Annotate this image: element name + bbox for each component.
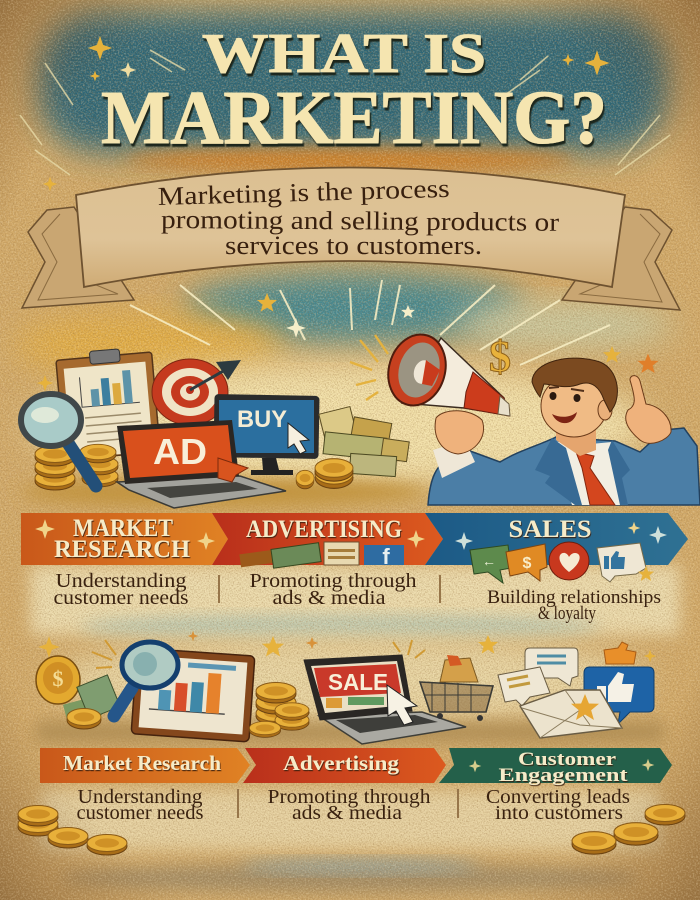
icon: BUY monitor	[213, 394, 320, 475]
ribbon labels: Customer	[518, 749, 617, 770]
icon: AD laptop: AD	[153, 431, 207, 472]
top process descriptions: ads & media	[272, 587, 386, 609]
bottom process descriptions: Understanding	[78, 786, 202, 808]
icon: speech bubbles	[498, 648, 578, 706]
icon: envelope with star	[520, 690, 622, 738]
ribbon stars	[35, 519, 667, 550]
icon: AD laptop	[117, 420, 286, 508]
ribbon labels	[54, 515, 592, 563]
icon: magnifying glass	[21, 394, 96, 486]
decorative coins left	[18, 806, 127, 855]
icon: coin and banknotes	[36, 656, 120, 729]
shirt	[552, 441, 624, 505]
icon: lower magnifying glass	[114, 642, 178, 716]
head	[541, 375, 607, 437]
icon: coin stacks	[35, 444, 118, 490]
process ribbon: top	[21, 513, 688, 565]
cuff and hand holding megaphone	[433, 440, 475, 478]
top process descriptions: Understanding	[56, 570, 186, 592]
sound lines	[350, 335, 388, 400]
segment: advertising	[212, 513, 443, 565]
segment: sales	[425, 513, 688, 565]
icon: lower coin stacks	[249, 682, 309, 737]
icon: sale laptop: SALE	[328, 669, 388, 695]
bottom process descriptions: customer needs	[76, 802, 204, 824]
tie	[576, 452, 615, 505]
banner text	[157, 174, 560, 260]
face	[550, 392, 556, 400]
top process descriptions: Building relationships	[487, 587, 661, 608]
icon: tablet chart	[131, 648, 255, 742]
bottom process descriptions: Converting leads	[486, 786, 630, 808]
top process descriptions: Promoting through	[250, 570, 416, 592]
icon: sale laptop	[304, 655, 466, 744]
segment: market research	[40, 748, 250, 783]
bottom process descriptions: ads & media	[292, 802, 402, 824]
lapels	[535, 438, 630, 505]
decorative coins right	[572, 804, 685, 854]
top process descriptions: customer needs	[54, 587, 189, 609]
bottom process descriptions: Promoting through	[268, 786, 430, 808]
banner text: Marketing is the process	[157, 174, 450, 211]
ribbon labels: MARKET	[73, 515, 173, 542]
burst rays under banner	[130, 280, 610, 365]
icon: dollar sign: $	[489, 332, 511, 381]
title: WHAT IS	[202, 23, 486, 85]
upper scene ground	[20, 477, 430, 507]
ribbon labels	[63, 749, 628, 786]
segment: advertising	[243, 748, 446, 783]
man with suit	[428, 358, 700, 505]
ribbon folds	[38, 214, 662, 302]
banner body	[76, 168, 625, 287]
ribbon tail right	[562, 207, 680, 310]
hair	[532, 358, 617, 412]
ribbon labels: Advertising	[283, 751, 400, 775]
gold stars around title	[43, 36, 610, 191]
ribbon labels: SALES	[508, 516, 592, 543]
icon row: social bubbles	[470, 542, 654, 583]
icon: target with arrow	[152, 359, 241, 425]
icon: shopping cart	[420, 655, 493, 721]
ribbon labels: ADVERTISING	[246, 516, 402, 543]
jacket	[428, 428, 700, 505]
process ribbon: bottom	[40, 748, 672, 786]
top process descriptions: & loyalty	[538, 603, 596, 624]
icon row: social bubbles: ←	[482, 553, 496, 569]
icon: coin and banknotes: $	[52, 666, 64, 691]
icon: clipboard with chart	[55, 346, 160, 460]
ribbon tail left	[22, 207, 134, 308]
icon row: advertising media: f	[382, 544, 390, 569]
icon: money pile and coins	[296, 407, 409, 489]
ribbon labels: RESEARCH	[54, 536, 191, 563]
neck	[556, 425, 596, 456]
pointing hand	[626, 376, 671, 443]
icon row: advertising media	[239, 542, 404, 569]
banner text: services to customers.	[225, 231, 482, 260]
icon row: social bubbles: $	[523, 555, 532, 572]
icon: like bubble	[584, 642, 654, 724]
ribbon banner	[22, 168, 680, 310]
icon: megaphone	[380, 328, 510, 416]
banner text: promoting and selling products or	[161, 205, 560, 237]
lower stars and rays	[38, 631, 656, 668]
segment: customer engagement	[439, 748, 672, 783]
burst rays around title	[20, 50, 670, 175]
bottom process descriptions	[76, 786, 630, 824]
stars under banner	[37, 293, 658, 391]
title: MARKETING?	[101, 76, 607, 160]
bottom process descriptions: into customers	[495, 802, 623, 824]
ribbon labels: Engagement	[498, 765, 628, 786]
top process descriptions	[54, 570, 661, 624]
segment: market research	[21, 513, 228, 565]
ribbon labels: Market Research	[63, 751, 221, 775]
icon: BUY monitor: BUY	[237, 406, 287, 433]
title	[101, 23, 607, 160]
lower scene ground	[35, 722, 665, 742]
